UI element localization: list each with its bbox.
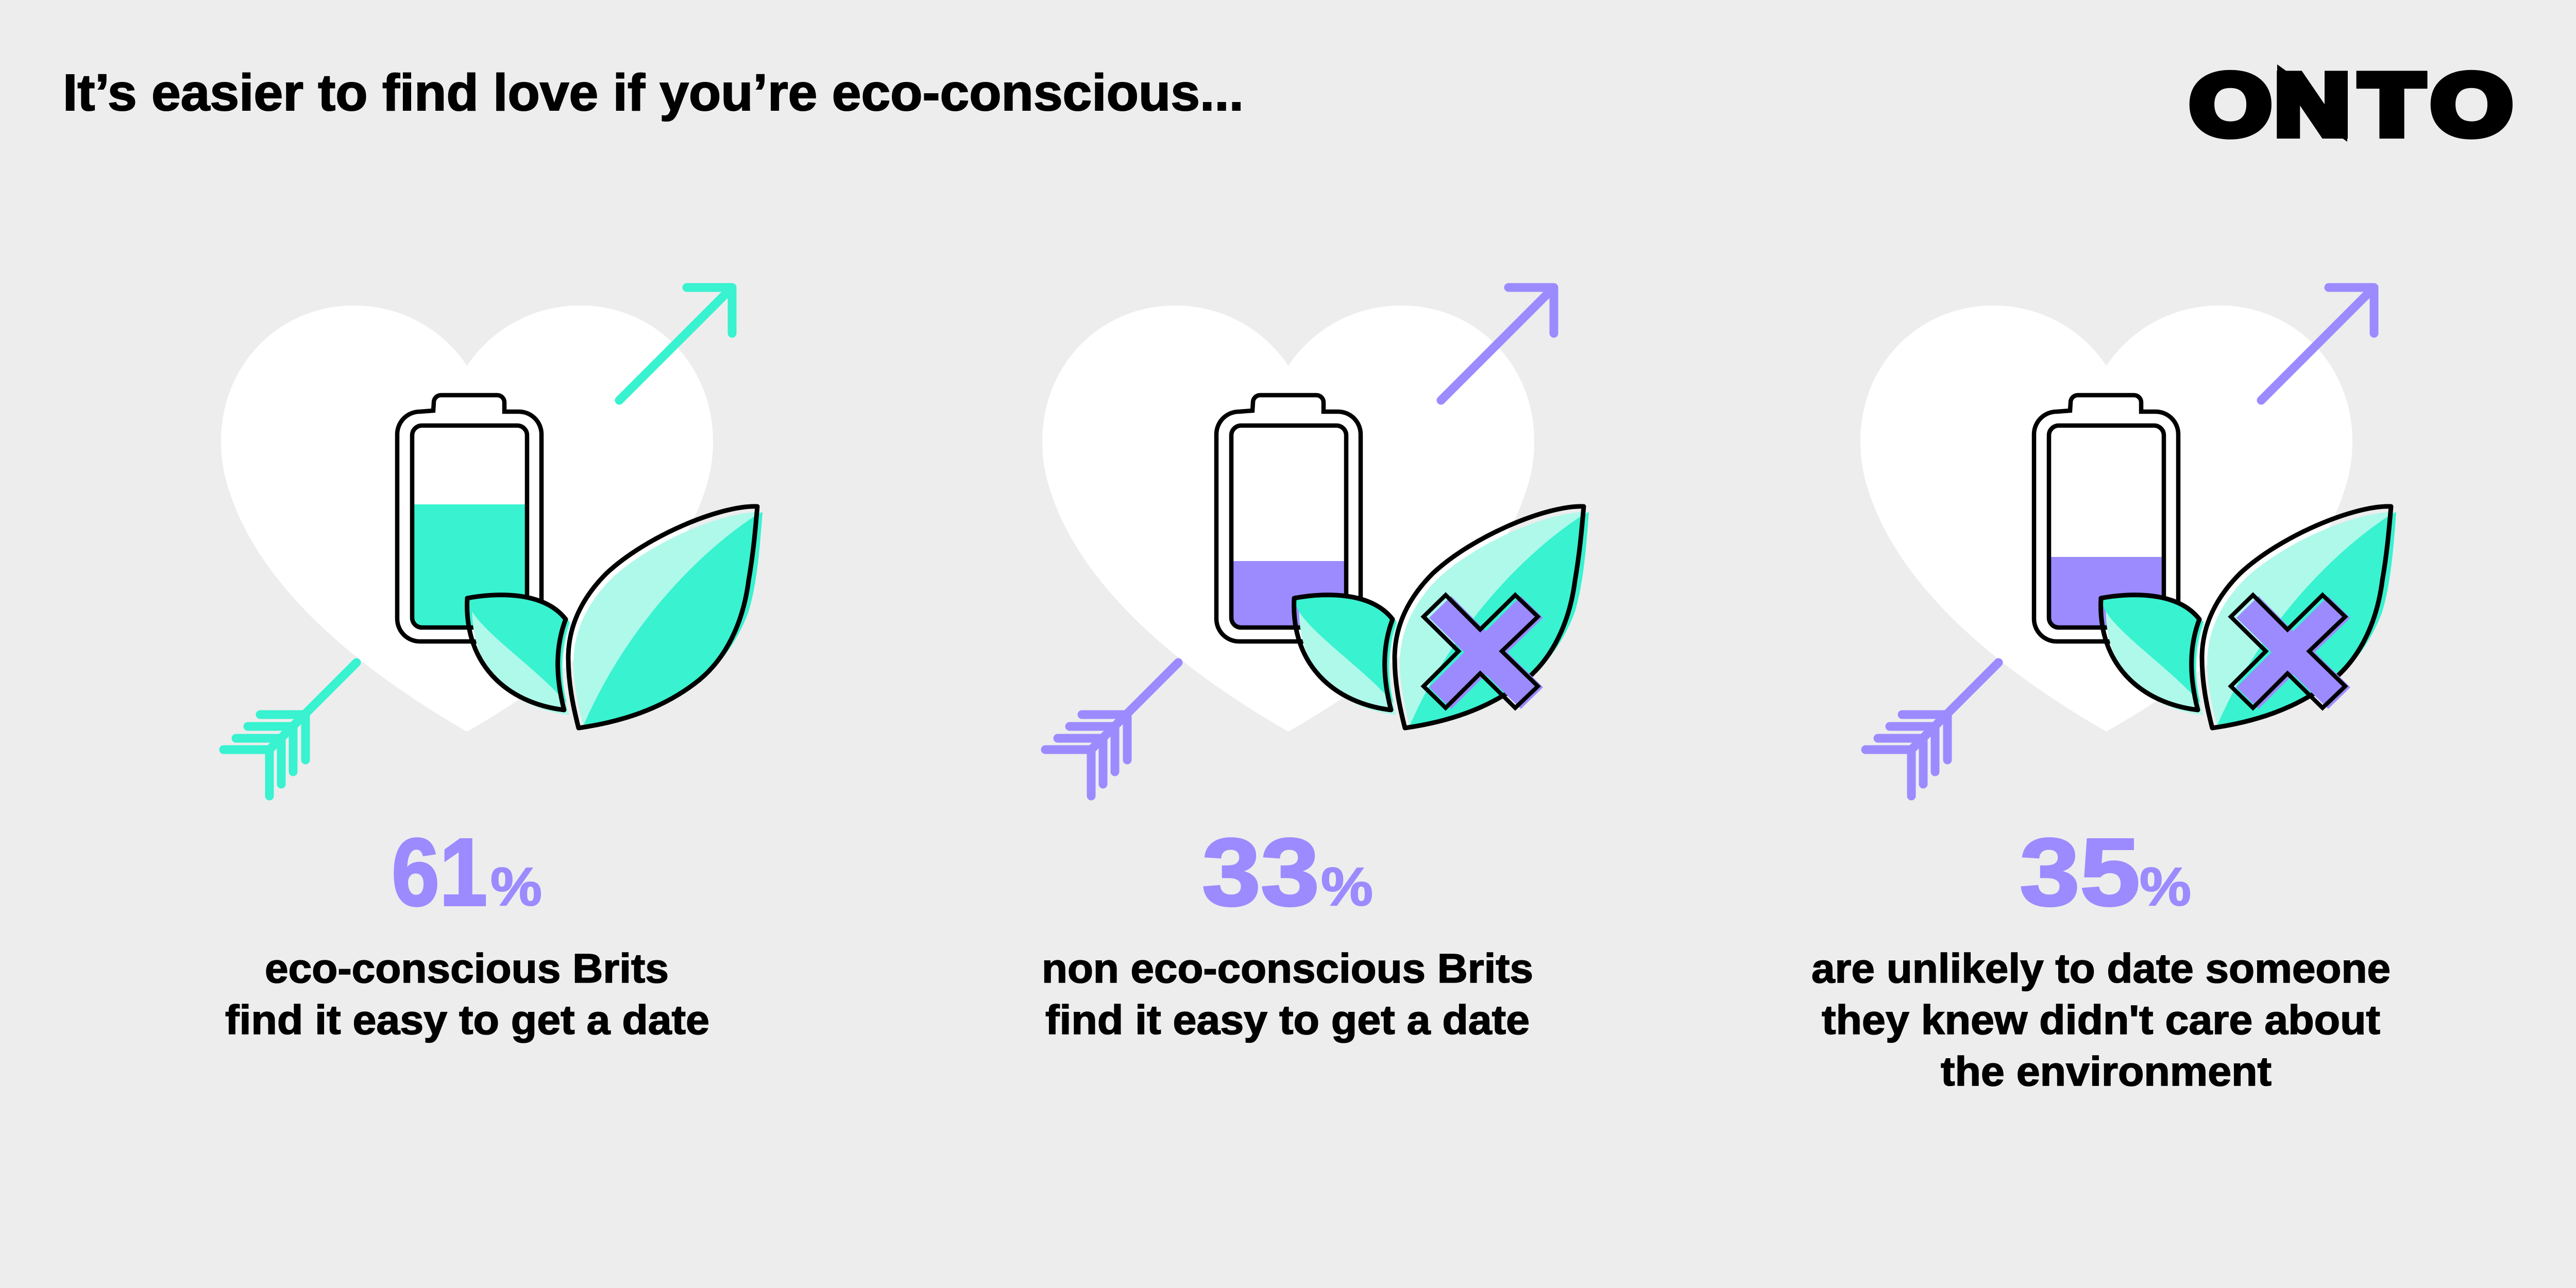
big leaf	[2202, 506, 2396, 728]
panel: eco-conscious Brits	[221, 287, 762, 1043]
big leaf	[1395, 506, 1589, 728]
caption: non eco-conscious Brits	[1042, 945, 1533, 991]
small leaf	[2101, 595, 2205, 715]
stat: 61%: %	[490, 857, 542, 917]
heart	[221, 306, 713, 732]
caption	[1042, 945, 1533, 1043]
arrow: head	[2261, 287, 2374, 400]
arrow: tail	[1045, 663, 1178, 796]
stat: 35%: %	[2140, 857, 2191, 917]
stat: 33%: 33	[1202, 819, 1319, 926]
icon: cross	[1423, 595, 1543, 709]
panel: unlikely to date	[1811, 287, 2396, 1094]
caption: are unlikely to date someone	[1811, 945, 2391, 991]
caption: find it easy to get a date	[225, 997, 709, 1043]
big leaf	[568, 506, 762, 728]
battery	[2034, 395, 2178, 641]
battery	[1216, 395, 1361, 641]
caption	[225, 945, 709, 1043]
logo: ONTO: ONTO	[2190, 57, 2512, 153]
battery level	[2049, 557, 2164, 628]
heart	[1042, 306, 1534, 732]
caption: they knew didn't care about	[1822, 997, 2380, 1043]
caption: the environment	[1941, 1048, 2272, 1094]
small leaf	[467, 595, 571, 715]
caption	[1811, 945, 2391, 1094]
battery outline	[2034, 395, 2178, 641]
stat: 33%: %	[1321, 857, 1373, 917]
caption: find it easy to get a date	[1045, 997, 1530, 1043]
caption: eco-conscious Brits	[265, 945, 669, 991]
stat: 61%: 61	[392, 819, 487, 926]
arrow: tail	[224, 663, 357, 796]
arrow: head	[619, 287, 732, 400]
small leaf	[1294, 595, 1398, 715]
battery outline	[397, 395, 541, 641]
battery level	[412, 504, 527, 628]
icon: cross	[2231, 595, 2350, 709]
arrow: head	[1441, 287, 1554, 400]
title: It’s easier to find love if you’re eco-conscious...	[63, 64, 1244, 122]
battery outline	[1216, 395, 1361, 641]
stat: 35%: 35	[2020, 819, 2140, 926]
heart	[1860, 306, 2352, 732]
battery	[397, 395, 541, 641]
panel: non eco-conscious Brits	[1042, 287, 1589, 1043]
battery level	[1231, 561, 1346, 628]
arrow: tail	[1866, 663, 1998, 796]
